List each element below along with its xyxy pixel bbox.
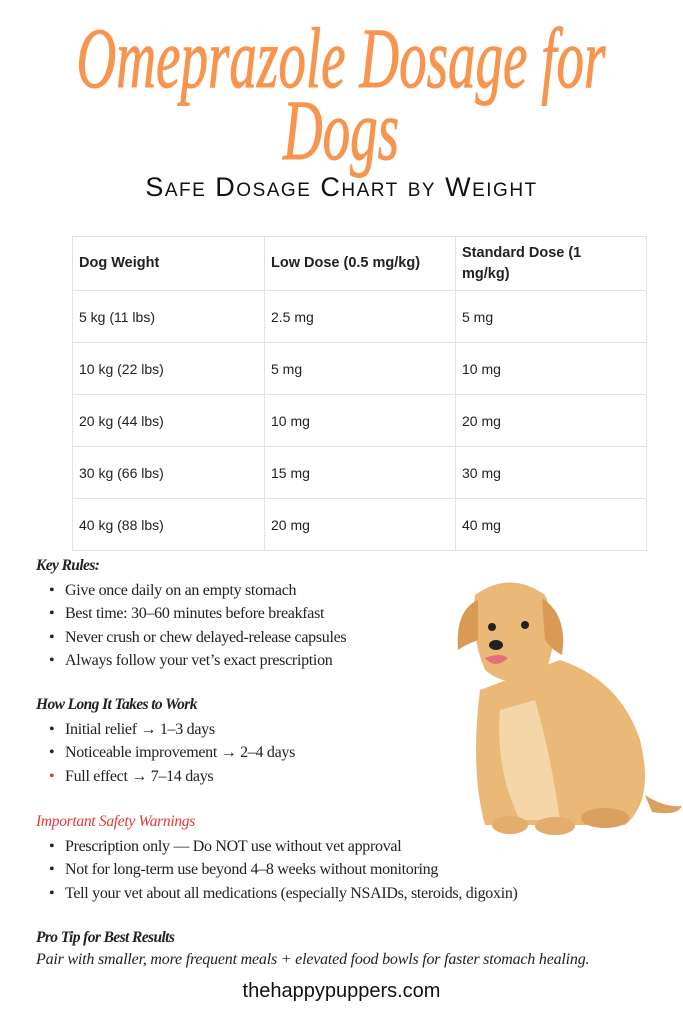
illustration: dog bbox=[458, 582, 682, 835]
dosage table: Dog Weight bbox=[79, 255, 159, 271]
subtitle: Safe Dosage Chart by Weight bbox=[145, 172, 538, 202]
list: warnings: Tell your vet about all medications (especially NSAIDs, steroids, digoxin) bbox=[65, 885, 518, 902]
dosage table: 30 kg (66 lbs) bbox=[79, 464, 164, 480]
title: Omeprazole Dosage for bbox=[77, 10, 605, 106]
dosage table: 10 mg bbox=[462, 360, 501, 376]
list: key rules: Always follow your vet’s exact prescription bbox=[65, 652, 332, 669]
dosage table: 5 mg bbox=[462, 308, 493, 324]
dosage table: 20 kg (44 lbs) bbox=[79, 412, 164, 428]
list: timing bbox=[50, 721, 295, 785]
list: timing: Full effect → 7–14 days bbox=[65, 768, 213, 785]
list: key rules: Give once daily on an empty stomach bbox=[65, 582, 296, 599]
title: Dogs bbox=[283, 82, 399, 178]
list: timing: Noticeable improvement → 2–4 days bbox=[65, 744, 295, 761]
dosage table: 40 mg bbox=[462, 516, 501, 532]
dosage table: 40 kg (88 lbs) bbox=[79, 516, 164, 532]
dosage table: 10 mg bbox=[271, 412, 310, 428]
dosage table: 5 mg bbox=[271, 360, 302, 376]
list: warnings: Not for long-term use beyond 4–8 weeks without monitoring bbox=[65, 861, 438, 878]
dosage table: 30 mg bbox=[462, 464, 501, 480]
heading: how long: How Long It Takes to Work bbox=[36, 696, 197, 713]
dosage table: 10 kg (22 lbs) bbox=[79, 360, 164, 376]
dosage table: 2.5 mg bbox=[271, 308, 314, 324]
dosage table: Low Dose (0.5 mg/kg) bbox=[271, 255, 420, 271]
title bbox=[77, 10, 606, 178]
footer url: thehappypuppers.com bbox=[243, 980, 440, 1002]
dosage table: 15 mg bbox=[271, 464, 310, 480]
heading: key rules: Key Rules: bbox=[36, 557, 99, 574]
list: key rules: Never crush or chew delayed-release capsules bbox=[65, 629, 346, 646]
pro tip text: Pair with smaller, more frequent meals + elevated food bowls for faster stomach healing. bbox=[36, 951, 589, 968]
list: key rules: Best time: 30–60 minutes before breakfast bbox=[65, 605, 324, 622]
list: warnings: Prescription only — Do NOT use without vet approval bbox=[65, 838, 401, 855]
list: key rules bbox=[50, 582, 346, 669]
heading: pro tip: Pro Tip for Best Results bbox=[36, 929, 174, 946]
list: timing: Initial relief → 1–3 days bbox=[65, 721, 215, 738]
dosage table: 20 mg bbox=[462, 412, 501, 428]
dosage table bbox=[72, 236, 647, 551]
dosage table: Standard Dose (1 mg/kg) bbox=[462, 244, 581, 282]
dosage table: 5 kg (11 lbs) bbox=[79, 308, 155, 324]
dosage table: 20 mg bbox=[271, 516, 310, 532]
list: warnings bbox=[50, 838, 518, 902]
heading: safety warnings: Important Safety Warnings bbox=[36, 813, 195, 830]
